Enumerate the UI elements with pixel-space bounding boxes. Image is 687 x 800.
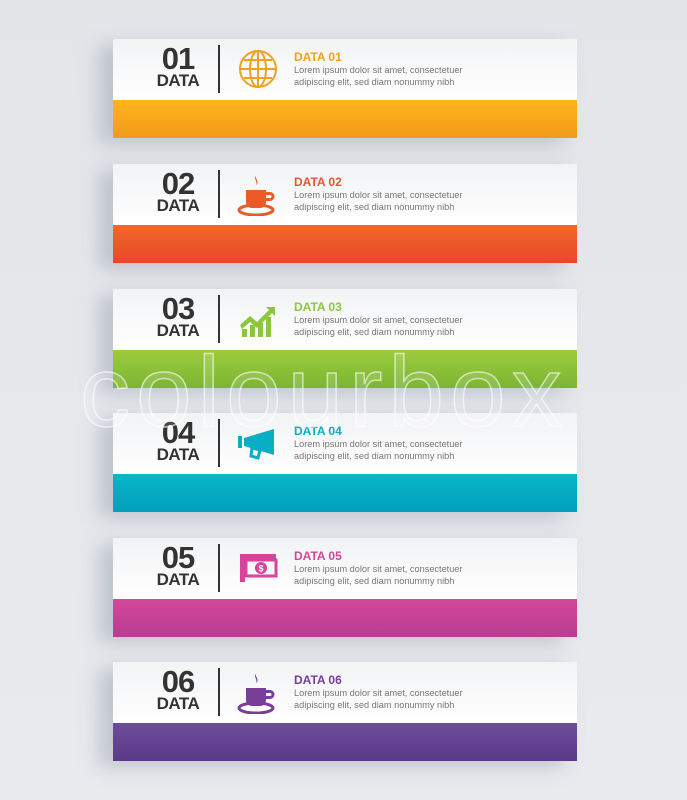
number 02 — [157, 166, 200, 215]
icon: money: $ — [258, 564, 264, 574]
number 04 — [157, 415, 200, 464]
number 01: 01 — [162, 41, 194, 76]
icon: cup — [238, 176, 274, 216]
number 06: 06 — [162, 664, 194, 699]
text 03: Lorem ipsum dolor sit amet, consectetuer — [294, 315, 463, 325]
number 04: DATA — [157, 445, 199, 464]
number 05 — [157, 540, 200, 589]
panel: data 03 — [113, 289, 577, 388]
icon: globe — [239, 50, 277, 88]
watermark: colourbox — [80, 336, 568, 448]
text 05: adipiscing elit, sed diam nonummy nibh — [294, 576, 454, 586]
panel: data 02 — [113, 164, 577, 263]
number 03: DATA — [157, 321, 199, 340]
text 06 — [294, 673, 463, 710]
panel: data 01 — [113, 39, 577, 138]
text 02: adipiscing elit, sed diam nonummy nibh — [294, 202, 454, 212]
text 01: DATA 01 — [294, 50, 342, 64]
icon: megaphone — [238, 429, 274, 460]
text 02: DATA 02 — [294, 175, 342, 189]
number 06 — [157, 664, 200, 713]
text 04: Lorem ipsum dolor sit amet, consectetuer — [294, 439, 463, 449]
number 01 — [157, 41, 200, 90]
text 05: DATA 05 — [294, 549, 342, 563]
number 05: 05 — [162, 540, 194, 575]
number 03 — [157, 291, 200, 340]
text 06: Lorem ipsum dolor sit amet, consectetuer — [294, 688, 463, 698]
text 03: adipiscing elit, sed diam nonummy nibh — [294, 327, 454, 337]
text 06: DATA 06 — [294, 673, 342, 687]
panel: data 05 — [113, 538, 577, 637]
text 01: adipiscing elit, sed diam nonummy nibh — [294, 77, 454, 87]
icon: growth chart — [240, 307, 275, 337]
text 03: DATA 03 — [294, 300, 342, 314]
panel: data 04 — [113, 413, 577, 512]
text 02: Lorem ipsum dolor sit amet, consectetuer — [294, 190, 463, 200]
number 02: 02 — [162, 166, 194, 201]
text 04: DATA 04 — [294, 424, 342, 438]
text 05 — [294, 549, 463, 586]
text 03 — [294, 300, 463, 337]
text 04 — [294, 424, 463, 461]
text 02 — [294, 175, 463, 212]
icon: cup — [238, 674, 274, 714]
panel: data 06 — [113, 662, 577, 761]
text 05: Lorem ipsum dolor sit amet, consectetuer — [294, 564, 463, 574]
number 01: DATA — [157, 71, 199, 90]
number 04: 04 — [162, 415, 194, 450]
number 03: 03 — [162, 291, 194, 326]
text 01: Lorem ipsum dolor sit amet, consectetuer — [294, 65, 463, 75]
number 05: DATA — [157, 570, 199, 589]
text 06: adipiscing elit, sed diam nonummy nibh — [294, 700, 454, 710]
text 04: adipiscing elit, sed diam nonummy nibh — [294, 451, 454, 461]
number 02: DATA — [157, 196, 199, 215]
number 06: DATA — [157, 694, 199, 713]
icon: money — [240, 554, 278, 582]
text 01 — [294, 50, 463, 87]
